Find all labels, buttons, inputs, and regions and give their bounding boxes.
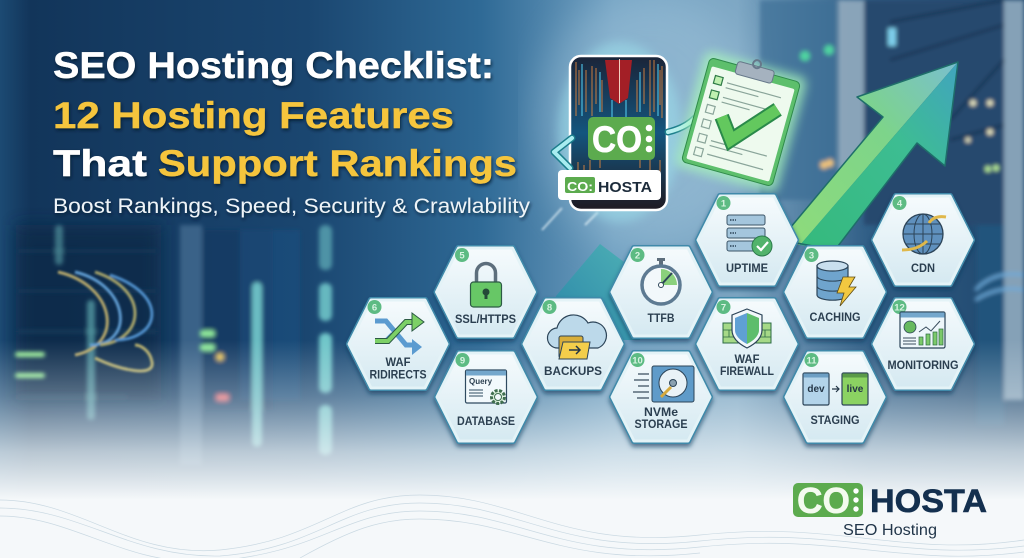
server racks left [16, 225, 161, 400]
CO:HOSTA logo: HOSTA [870, 483, 987, 519]
clipboard with checklist [674, 46, 809, 194]
hexagon 4: CDN: CDN [911, 263, 935, 275]
brand card [554, 42, 695, 222]
hexagon 2: TTFB [612, 248, 710, 336]
hexagon 10: NVMe STORAGE [612, 353, 710, 441]
hexagon 2: TTFB: TTFB [648, 313, 674, 325]
rear teal arrow [556, 244, 640, 340]
hexagon 6: WAF RIDIRECTS: WAF [386, 357, 410, 369]
hexagon 12: MONITORING: MONITORING [888, 360, 959, 372]
checklist rows [694, 75, 784, 173]
hexagon 12: MONITORING [874, 300, 972, 388]
hexagon 9: DATABASE [437, 353, 535, 441]
title: That [53, 143, 147, 184]
hexagon 7: WAF FIREWALL: WAF [734, 354, 760, 366]
hexagon 11: STAGING: STAGING [810, 415, 860, 427]
hexagon 6: WAF RIDIRECTS: 6 [372, 302, 377, 314]
hexagon 4: CDN: 4 [897, 198, 903, 210]
hexagon 10: NVMe STORAGE: STORAGE [634, 419, 688, 431]
hexagon 4: CDN [874, 196, 972, 284]
CO:HOSTA logo: CO [797, 480, 850, 521]
CO:HOSTA strip: CO: [567, 179, 593, 194]
CO:HOSTA strip: HOSTA [598, 179, 652, 196]
hexagon 7: WAF FIREWALL: FIREWALL [720, 366, 774, 378]
hexagon 8: BACKUPS: BACKUPS [544, 366, 602, 378]
hexagon 3: CACHING: CACHING [810, 312, 861, 324]
large green growth arrow [780, 62, 958, 250]
hexagon 9: DATABASE: 9 [460, 356, 465, 366]
hexagon 8: BACKUPS: 8 [547, 302, 552, 314]
hexagon 8: BACKUPS [524, 300, 622, 388]
hexagon 2: TTFB: 2 [635, 250, 640, 262]
CO: badge: CO [592, 119, 642, 160]
CO:HOSTA strip [558, 170, 661, 200]
subtitle: Boost Rankings, Speed, Security & Crawlability [53, 195, 531, 218]
hexagon 9: DATABASE: Query [469, 377, 493, 386]
hexagon 11: STAGING: dev [807, 384, 825, 395]
hexagon 5: SSL/HTTPS: 5 [459, 250, 465, 262]
title [53, 45, 517, 184]
fade to white [0, 340, 1024, 500]
hexagon 7: WAF FIREWALL: 7 [721, 302, 726, 314]
hexagon 6: WAF RIDIRECTS: RIDIRECTS [370, 370, 427, 382]
hexagon 11: STAGING [786, 353, 884, 441]
hexagon 1: UPTIME: 1 [721, 198, 727, 210]
hexagon 10: NVMe STORAGE: 10 [632, 356, 643, 366]
hexagon 10: NVMe STORAGE: NVMe [644, 407, 678, 419]
hexagon 6: WAF RIDIRECTS [349, 300, 447, 388]
server racks right [760, 0, 1024, 425]
hexagon 3: CACHING [786, 248, 884, 336]
hexagon 7: WAF FIREWALL [698, 300, 796, 388]
hexagon 11: STAGING: 11 [806, 356, 817, 366]
light streaks [542, 208, 598, 230]
hexagon 3: CACHING: 3 [809, 250, 814, 262]
hexagon 5: SSL/HTTPS: SSL/HTTPS [455, 314, 516, 326]
hexagon 12: MONITORING: 12 [894, 302, 905, 314]
network cables [58, 272, 152, 371]
hexagon 5: SSL/HTTPS [436, 248, 534, 336]
hexagon 1: UPTIME [698, 196, 796, 284]
hexagon 9: DATABASE: DATABASE [457, 416, 515, 428]
CO:HOSTA logo: SEO Hosting [843, 522, 937, 539]
title: Support Rankings [158, 143, 517, 184]
hexagon 11: STAGING: live [847, 384, 864, 395]
title: 12 Hosting Features [53, 95, 454, 136]
decorative waves [0, 495, 1024, 558]
big check mark [716, 95, 778, 150]
CO:HOSTA logo [793, 480, 987, 539]
hexagon 1: UPTIME: UPTIME [726, 263, 768, 275]
title: SEO Hosting Checklist: [53, 45, 494, 86]
